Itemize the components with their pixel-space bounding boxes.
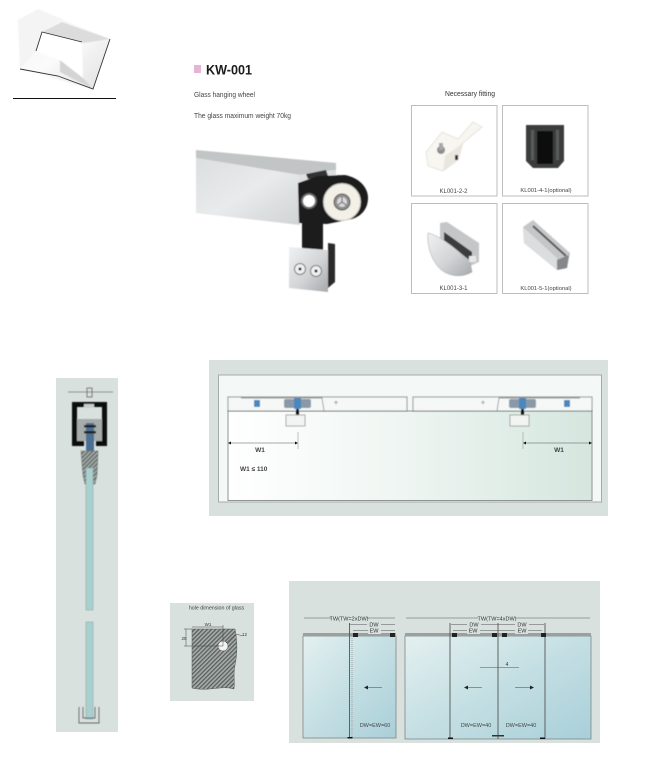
single door elevation: DW (369, 622, 379, 628)
panel: hole dimension of glass (170, 603, 254, 701)
single door elevation: DW=EW=60 (360, 723, 390, 729)
heading: necessary fitting: Necessary fitting (445, 91, 495, 98)
fitting card: KL001-3-1 (412, 204, 497, 294)
double door elevation (405, 614, 591, 739)
left rail with roller: + (334, 398, 339, 407)
fitting card: KL001-3-1: KL001-3-1 (439, 286, 468, 292)
double door elevation: DW=EW=40 (461, 723, 491, 729)
panel: hole dimension of glass: W1 (205, 622, 212, 627)
W1 dimension left: W1 (255, 447, 265, 454)
single door elevation (303, 614, 396, 738)
double door elevation: 4 (506, 662, 509, 668)
glass panel with gradient (228, 411, 592, 500)
fitting card: KL001-4-1 optional (502, 106, 588, 196)
text: product description: The glass maximum weight 70kg (194, 113, 291, 120)
double door elevation: EW (518, 628, 527, 634)
double door elevation: DW (469, 622, 479, 628)
fitting card: KL001-5-1 optional: KL001-5-1(optional) (520, 286, 572, 292)
right rail with roller (413, 397, 592, 426)
panel: hole dimension of glass: 12 (242, 632, 248, 637)
W1 dimension left (228, 432, 298, 454)
double door elevation: DW (517, 622, 527, 628)
right rail with roller: + (481, 398, 486, 407)
fitting card: KL001-5-1 optional (502, 204, 588, 294)
double door elevation: TW(TW=4xDW) (478, 616, 517, 622)
fitting card: KL001-2-2 (412, 106, 497, 196)
W1 dimension right: W1 (554, 447, 564, 454)
logo (13, 9, 116, 98)
fitting card: KL001-2-2: KL001-2-2 (439, 189, 468, 195)
product photo: hanging wheel on rail (196, 150, 368, 292)
left rail with roller (228, 397, 407, 426)
double door elevation: DW=EW=40 (506, 723, 536, 729)
double door elevation: EW (469, 628, 478, 634)
panel: door dimension elevations (289, 581, 600, 743)
W1 limit note: W1 ≤ 110 (240, 466, 268, 473)
panel: hole dimension of glass: 25 (181, 636, 187, 641)
panel: vertical cross-section (56, 378, 118, 732)
W1 dimension right (523, 432, 592, 454)
single door elevation: TW(TW=2xDW) (330, 616, 369, 622)
title: KW-001: KW-001 (206, 62, 252, 78)
single door elevation: EW (370, 628, 379, 634)
text: product description (194, 92, 291, 120)
text: product description: Glass hanging wheel (194, 92, 255, 99)
panel: hole dimension of glass: hole dimension of glass (189, 606, 245, 612)
panel: front view W1 diagram (209, 360, 608, 516)
fitting card: KL001-4-1 optional: KL001-4-1(optional) (520, 188, 572, 194)
